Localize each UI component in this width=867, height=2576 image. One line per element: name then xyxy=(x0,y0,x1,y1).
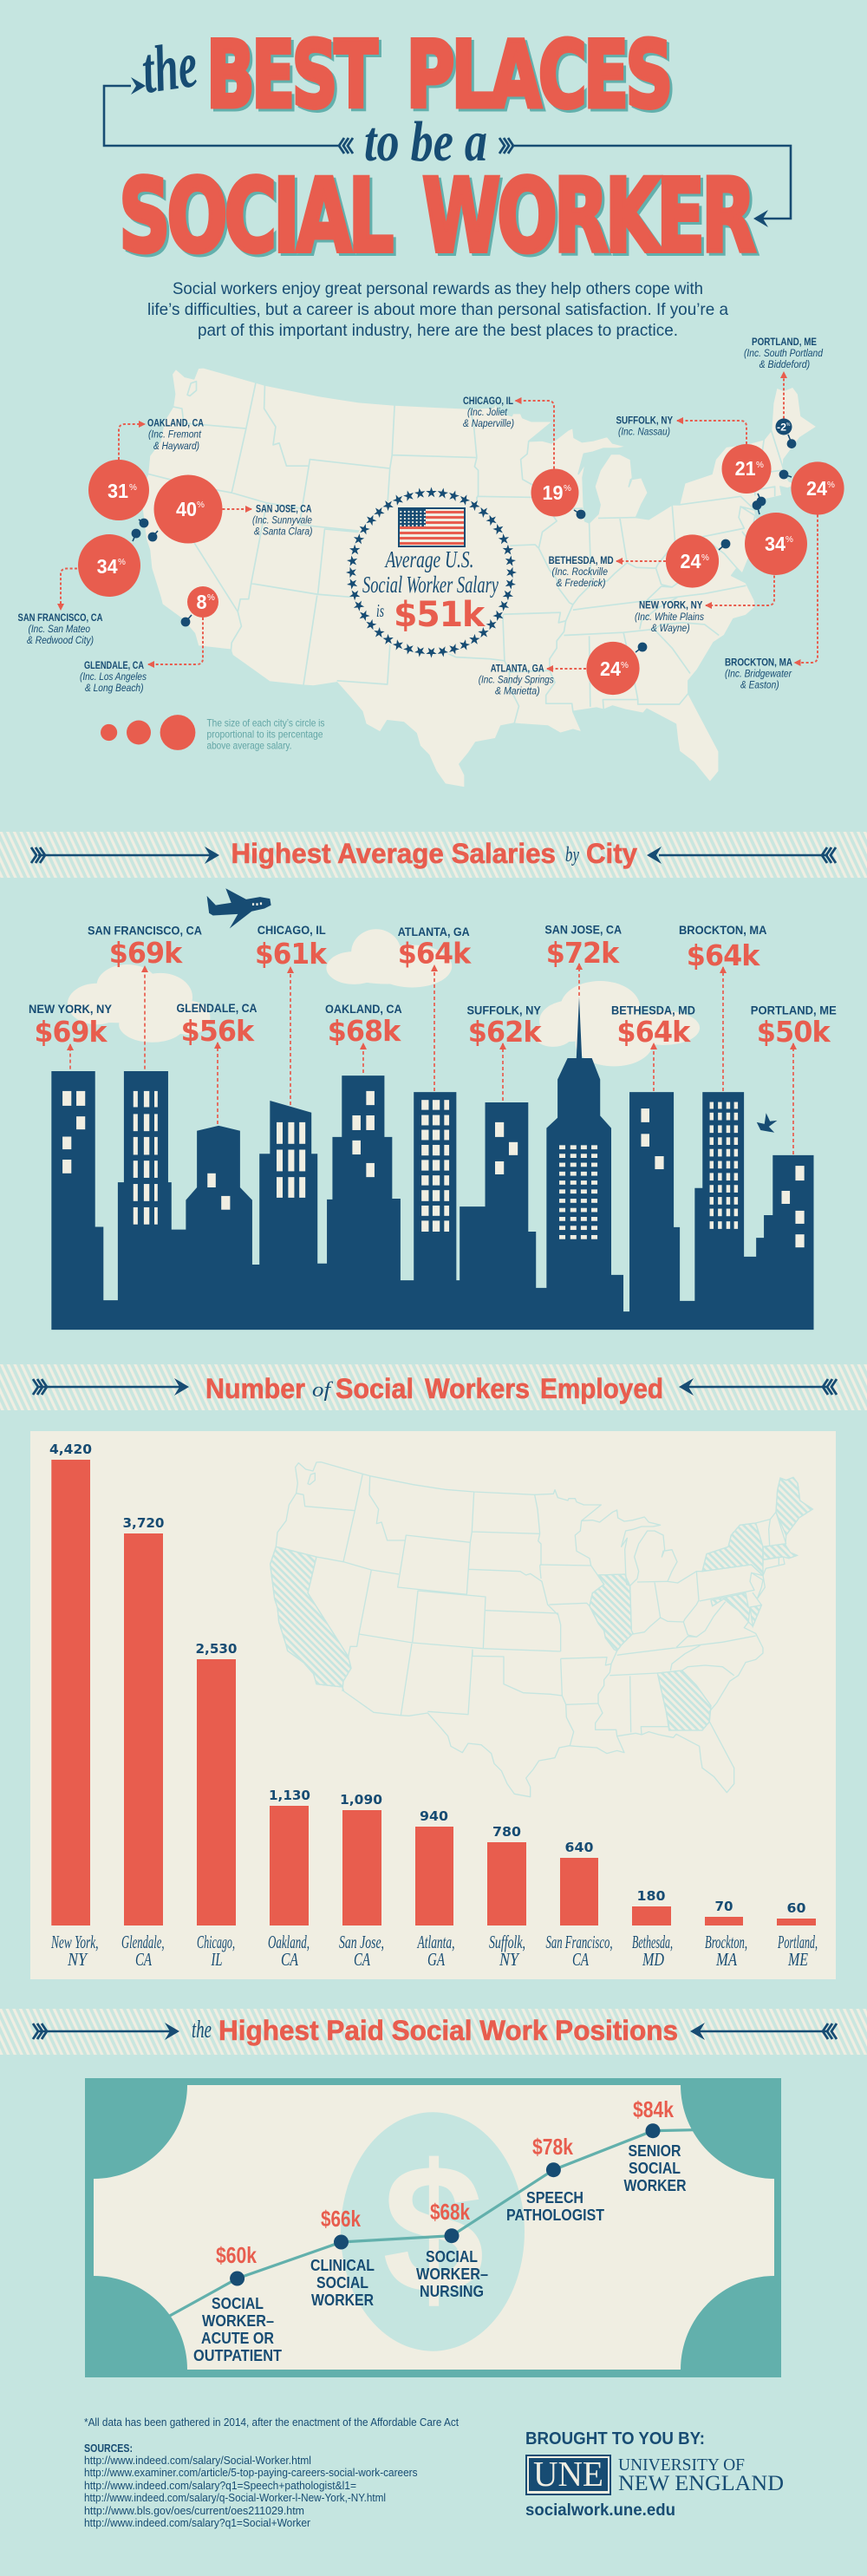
bar city labels: San Jose, xyxy=(339,1932,384,1952)
label: Brockton xyxy=(725,657,792,691)
title words: best places: PLACES xyxy=(406,22,669,129)
position: senior social worker: SENIOR xyxy=(628,2142,681,2160)
section heading: highest paid social work positions: Highest Paid Social Work Positions xyxy=(218,2015,678,2046)
circle: San Jose 40%: % xyxy=(197,500,205,510)
bar values: 1,130 xyxy=(269,1788,310,1803)
icon: airplane xyxy=(207,888,271,928)
salary: Portland xyxy=(751,1004,837,1049)
bar city labels: Portland, xyxy=(777,1932,818,1952)
intro paragraph xyxy=(147,279,728,340)
intro paragraph: life’s difficulties, but a career is about more than personal satisfaction. If you’re a xyxy=(147,300,728,319)
position: senior social worker xyxy=(624,2096,687,2194)
footnote and sources: http://www.indeed.com/salary/Social-Worker.html xyxy=(84,2454,311,2467)
bar city labels: CA xyxy=(135,1949,152,1970)
sponsor block: University of New England: socialwork.une.edu xyxy=(525,2501,675,2520)
salary: Suffolk: $62k xyxy=(468,1015,543,1049)
label: Suffolk xyxy=(616,416,673,438)
circle: New York 34% xyxy=(745,513,807,575)
circle: Brockton 24%: 24 xyxy=(806,477,827,500)
bar values: 60 xyxy=(787,1900,806,1916)
label: Bethesda: BETHESDA, MD xyxy=(549,556,614,566)
label: Chicago: CHICAGO, IL xyxy=(463,396,513,407)
salary: New York: $69k xyxy=(35,1015,108,1049)
label: New York xyxy=(635,601,704,634)
city labels xyxy=(17,337,824,697)
label: Bethesda: & Frederick) xyxy=(557,579,606,589)
salary: San Jose: SAN JOSE, CA xyxy=(544,922,622,936)
footnote and sources: http://www.bls.gov/oes/current/oes211029.htm xyxy=(84,2504,304,2517)
label: Portland: & Biddeford) xyxy=(759,360,810,370)
circle: San Jose 40%: 40 xyxy=(176,498,197,520)
bar values: 2,530 xyxy=(196,1641,238,1657)
title xyxy=(104,22,791,278)
bar city labels: CA xyxy=(281,1949,298,1970)
label: Atlanta: & Marietta) xyxy=(495,687,540,697)
icon: dollar sign in oval xyxy=(341,2112,525,2351)
bill frame xyxy=(85,2078,781,2377)
label: Portland: PORTLAND, ME xyxy=(752,337,817,348)
label: Chicago: & Naperville) xyxy=(463,419,514,429)
salary: San Francisco xyxy=(88,924,202,970)
label: Atlanta: (Inc. Sandy Springs xyxy=(479,676,554,686)
section heading: number of social workers employed: Employed xyxy=(540,1373,663,1404)
salary: Glendale xyxy=(177,1001,257,1048)
label: Glendale: GLENDALE, CA xyxy=(84,661,144,671)
circle: Chicago 19% xyxy=(531,468,579,517)
bar values: 70 xyxy=(714,1899,733,1914)
skyline buildings xyxy=(51,997,813,1330)
sponsor block: University of New England: BROUGHT TO YOU BY: xyxy=(525,2429,705,2449)
position: clinical social worker: $66k xyxy=(321,2206,361,2232)
bar city labels: CA xyxy=(572,1949,589,1970)
position: acute or outpatient: ACUTE OR xyxy=(201,2330,274,2347)
salary: Bethesda xyxy=(611,1004,695,1049)
position: social worker nursing xyxy=(416,2199,488,2300)
label: Suffolk: SUFFOLK, NY xyxy=(616,416,673,427)
map pins xyxy=(132,435,796,652)
title words: best places: BEST xyxy=(209,24,381,132)
label: San Francisco: (Inc. San Mateo xyxy=(28,624,91,635)
position: speech pathologist xyxy=(506,2134,604,2224)
star ring xyxy=(346,487,517,657)
section heading: number of social workers employed xyxy=(0,1364,867,1410)
label: Oakland: (Inc. Fremont xyxy=(148,430,202,441)
bar city labels: Oakland, xyxy=(268,1932,310,1952)
salary: Oakland: $68k xyxy=(328,1014,401,1048)
circle: Brockton 24%: % xyxy=(827,481,835,490)
circle: Portland -2%: % xyxy=(786,422,791,428)
label: Oakland xyxy=(147,419,204,452)
circle: Portland -2%: -2 xyxy=(777,421,786,433)
salary: Portland: PORTLAND, ME xyxy=(751,1004,837,1017)
salary: San Jose: $72k xyxy=(546,936,620,970)
label: Suffolk: (Inc. Nassau) xyxy=(618,428,670,438)
badge text: Average U.S. xyxy=(384,546,473,572)
title words: social worker: SOCIAL xyxy=(121,161,395,278)
circle: Portland -2% xyxy=(775,418,792,435)
position: clinical social worker: CLINICAL xyxy=(310,2257,375,2274)
badge text: Social Worker Salary xyxy=(362,572,499,598)
position: acute or outpatient: SOCIAL xyxy=(212,2295,264,2312)
label: Atlanta xyxy=(479,664,554,697)
title words: social worker: SOCIAL xyxy=(119,158,393,276)
bar city labels: NY xyxy=(499,1949,520,1970)
section heading: number of social workers employed: Social xyxy=(336,1373,414,1404)
position: senior social worker: WORKER xyxy=(624,2177,687,2194)
label: Atlanta: ATLANTA, GA xyxy=(491,664,544,675)
salary: Chicago: $61k xyxy=(255,937,328,971)
circle: Suffolk 21% xyxy=(721,444,772,494)
label: Glendale xyxy=(80,661,147,694)
circle: San Francisco 34% xyxy=(78,534,140,597)
circle: Atlanta 24% xyxy=(586,642,640,695)
salary: New York xyxy=(29,1002,113,1049)
bars xyxy=(51,1460,816,1925)
icon: dollar sign in oval: $ xyxy=(382,2126,485,2331)
salary: San Francisco: $69k xyxy=(109,936,183,970)
salary: Atlanta: $64k xyxy=(398,936,472,970)
label: New York: NEW YORK, NY xyxy=(639,601,703,611)
salary: Glendale: GLENDALE, CA xyxy=(177,1001,257,1015)
label: Glendale: & Long Beach) xyxy=(85,683,144,694)
circle: Brockton 24% xyxy=(791,461,844,515)
background map with hatched states xyxy=(271,1462,812,1797)
label: San Jose xyxy=(252,505,313,537)
label: Oakland: & Hayward) xyxy=(153,441,199,452)
bar city labels: GA xyxy=(427,1949,445,1970)
footnote and sources: http://www.indeed.com/salary?q1=Speech+pathologist&l1= xyxy=(84,2479,356,2492)
section heading: number of social workers employed: Number xyxy=(205,1373,305,1404)
circle: Bethesda 24%: % xyxy=(701,553,709,563)
position: acute or outpatient: OUTPATIENT xyxy=(193,2347,282,2364)
circle: Suffolk 21%: % xyxy=(756,461,764,470)
position: social worker nursing: SOCIAL xyxy=(426,2248,478,2265)
label: Glendale: (Inc. Los Angeles xyxy=(80,672,147,683)
legend: circle sizes: above average salary. xyxy=(206,739,291,751)
panel: dollar bill line chart xyxy=(85,2078,781,2377)
title words: best places: PLACES xyxy=(409,24,673,132)
position: senior social worker: SOCIAL xyxy=(629,2160,681,2177)
bar city labels: Bethesda, xyxy=(632,1932,673,1952)
section heading: highest average salaries by city xyxy=(0,832,867,878)
circle: Suffolk 21%: 21 xyxy=(735,457,756,480)
sponsor block: University of New England xyxy=(525,2429,784,2520)
label: Oakland: OAKLAND, CA xyxy=(147,419,204,429)
circle: New York 34%: % xyxy=(786,535,793,545)
salary: Bethesda: BETHESDA, MD xyxy=(611,1004,695,1017)
bar values: 4,420 xyxy=(49,1442,92,1457)
trend points xyxy=(230,2123,661,2286)
bar values: 780 xyxy=(492,1824,521,1840)
dotted arrows from circles to city labels xyxy=(61,372,818,669)
label: Chicago: (Inc. Joliet xyxy=(467,408,508,418)
circle: Chicago 19%: 19 xyxy=(543,481,564,504)
bar city labels: Atlanta, xyxy=(416,1932,454,1952)
circle: San Francisco 34%: % xyxy=(118,558,126,567)
bar city labels: NY xyxy=(67,1949,88,1970)
footnote and sources: http://www.indeed.com/salary/q-Social-Worker-l-New-York,-NY.html xyxy=(84,2491,386,2504)
clouds xyxy=(68,929,700,1066)
position: clinical social worker: WORKER xyxy=(311,2292,374,2309)
bar city labels: Glendale, xyxy=(121,1932,165,1952)
position: social worker nursing: WORKER– xyxy=(416,2265,488,2283)
circle: San Francisco 34%: 34 xyxy=(97,555,118,578)
bar city labels: IL xyxy=(211,1949,222,1970)
position: social worker nursing: NURSING xyxy=(420,2283,484,2300)
circle: Glendale 8% xyxy=(187,586,218,618)
title words: social worker xyxy=(119,158,758,278)
title arrows xyxy=(104,77,791,227)
circle: New York 34%: 34 xyxy=(765,533,786,555)
sponsor block: University of New England: UNIVERSITY OF xyxy=(618,2455,745,2475)
position: acute or outpatient: WORKER– xyxy=(202,2312,274,2330)
map of the United States xyxy=(140,368,817,788)
position: senior social worker: $84k xyxy=(633,2096,674,2122)
legend: circle sizes xyxy=(101,715,324,751)
circle: Oakland 31%: 31 xyxy=(108,480,128,502)
circle: Bethesda 24% xyxy=(666,534,719,588)
label: San Francisco: SAN FRANCISCO, CA xyxy=(17,613,102,624)
position: speech pathologist: $78k xyxy=(532,2134,573,2160)
bar values: 940 xyxy=(420,1808,448,1824)
salary: Suffolk: SUFFOLK, NY xyxy=(466,1004,542,1017)
city salary labels xyxy=(29,922,837,1049)
badge text: is xyxy=(376,600,384,621)
bar values: 1,090 xyxy=(340,1792,382,1808)
salary: Bethesda: $64k xyxy=(616,1015,691,1049)
circle: Atlanta 24%: % xyxy=(621,661,629,670)
label: Chicago xyxy=(463,396,514,429)
bar city labels xyxy=(50,1932,818,1970)
section heading: number of social workers employed: of xyxy=(312,1379,334,1402)
section heading: highest paid social work positions xyxy=(0,2009,867,2055)
label: New York: & Wayne) xyxy=(651,624,690,634)
salary: Chicago: CHICAGO, IL xyxy=(257,923,326,937)
salary: Glendale: $56k xyxy=(181,1014,255,1048)
circle: Oakland 31%: % xyxy=(129,483,137,493)
label: Bethesda: (Inc. Rockville xyxy=(551,567,608,578)
sponsor block: University of New England: NEW ENGLAND xyxy=(618,2472,784,2495)
badge text: $51k xyxy=(394,595,486,635)
salary: Brockton: BROCKTON, MA xyxy=(679,923,766,937)
intro paragraph: Social workers enjoy great personal rewards as they help others cope with xyxy=(173,279,703,298)
panel: workers employed bar chart xyxy=(30,1431,836,1979)
label: Brockton: BROCKTON, MA xyxy=(725,657,792,668)
bar city labels: San Francisco, xyxy=(546,1932,612,1952)
position: clinical social worker xyxy=(310,2206,375,2309)
section heading: highest paid social work positions: the xyxy=(192,2017,212,2043)
section heading: highest average salaries by city: City xyxy=(586,838,637,869)
circle: Glendale 8%: 8 xyxy=(196,591,207,613)
legend: circle sizes: proportional to its percentage xyxy=(206,729,323,741)
label: Bethesda xyxy=(549,556,614,589)
position: speech pathologist: PATHOLOGIST xyxy=(506,2207,604,2224)
legend: circle sizes: The size of each city’s circle is xyxy=(206,716,324,729)
panel: US map with city percentages xyxy=(17,337,844,788)
intro paragraph: part of this important industry, here are the best places to practice. xyxy=(198,321,678,340)
bar values: 640 xyxy=(565,1840,593,1855)
circle: San Jose 40% xyxy=(154,475,222,543)
salary: Brockton xyxy=(679,923,766,972)
icon: bird xyxy=(757,1113,777,1133)
bar city labels: CA xyxy=(354,1949,370,1970)
dashed arrows from buildings to salaries xyxy=(70,964,793,1154)
salary trend line xyxy=(168,2130,694,2317)
bar values: 3,720 xyxy=(123,1515,165,1531)
bar city labels: Chicago, xyxy=(197,1932,235,1952)
position: clinical social worker: SOCIAL xyxy=(316,2274,368,2292)
section heading: number of social workers employed: Workers xyxy=(425,1373,530,1404)
salary: Oakland: OAKLAND, CA xyxy=(325,1002,402,1016)
label: San Jose: (Inc. Sunnyvale xyxy=(252,515,312,526)
position: acute or outpatient: $60k xyxy=(216,2242,257,2268)
bar city labels: New York, xyxy=(50,1932,99,1952)
position: acute or outpatient xyxy=(193,2242,282,2364)
bar values xyxy=(49,1442,806,1916)
label: Portland xyxy=(744,337,824,370)
footnote and sources xyxy=(84,2416,459,2529)
panel: skyline salaries xyxy=(29,888,837,1330)
label: New York: (Inc. White Plains xyxy=(635,612,704,623)
position: speech pathologist: SPEECH xyxy=(526,2189,583,2207)
footnote and sources: http://www.indeed.com/salary?q1=Social+Worker xyxy=(84,2516,311,2529)
circle: Atlanta 24%: 24 xyxy=(600,657,621,680)
title word: the: the xyxy=(137,28,202,108)
position: social worker nursing: $68k xyxy=(430,2199,470,2225)
label: Portland: (Inc. South Portland xyxy=(744,349,824,359)
label: San Francisco: & Redwood City) xyxy=(27,636,94,646)
bar city labels: Brockton, xyxy=(705,1932,747,1952)
badge: average salary with star ring xyxy=(346,487,517,657)
label: Brockton: (Inc. Bridgewater xyxy=(725,670,792,680)
salary: San Francisco: SAN FRANCISCO, CA xyxy=(88,924,202,938)
bar city labels: MD xyxy=(642,1949,664,1970)
circle: Chicago 19%: % xyxy=(564,484,571,494)
label: San Francisco xyxy=(17,613,102,646)
section heading: highest average salaries by city: by xyxy=(565,844,579,866)
logo: UNE: UNE xyxy=(533,2454,603,2494)
title words: best places xyxy=(206,22,673,132)
bar city labels: ME xyxy=(787,1949,808,1970)
label: San Jose: & Santa Clara) xyxy=(254,526,313,537)
circle: Oakland 31% xyxy=(88,460,149,520)
label: Brockton: & Easton) xyxy=(740,681,779,691)
salary: Brockton: $64k xyxy=(687,938,760,972)
icon: US flag xyxy=(398,507,466,547)
bar values: 180 xyxy=(636,1888,666,1904)
salary: Atlanta: ATLANTA, GA xyxy=(398,925,470,938)
bar city labels: Suffolk, xyxy=(489,1932,525,1952)
footnote and sources: *All data has been gathered in 2014, after the enactment of the Affordable Care Act xyxy=(84,2416,459,2429)
salary: Chicago xyxy=(255,923,328,971)
circle: Glendale 8%: % xyxy=(207,593,215,603)
badge text xyxy=(362,546,499,635)
label: San Jose: SAN JOSE, CA xyxy=(256,505,312,515)
footnote and sources: SOURCES: xyxy=(84,2442,133,2455)
salary: Portland: $50k xyxy=(757,1015,831,1049)
circle: Bethesda 24%: 24 xyxy=(680,550,701,572)
salary: New York: NEW YORK, NY xyxy=(29,1002,113,1016)
bar city labels: MA xyxy=(715,1949,737,1970)
title words: best places: BEST xyxy=(206,22,378,129)
footnote and sources: http://www.examiner.com/article/5-top-paying-careers-social-work-careers xyxy=(84,2466,418,2479)
section heading: highest average salaries by city: Highest Average Salaries xyxy=(231,838,556,869)
salary: San Jose xyxy=(544,922,622,970)
title words: to be a: to be a xyxy=(364,110,487,173)
city circles xyxy=(78,418,844,695)
